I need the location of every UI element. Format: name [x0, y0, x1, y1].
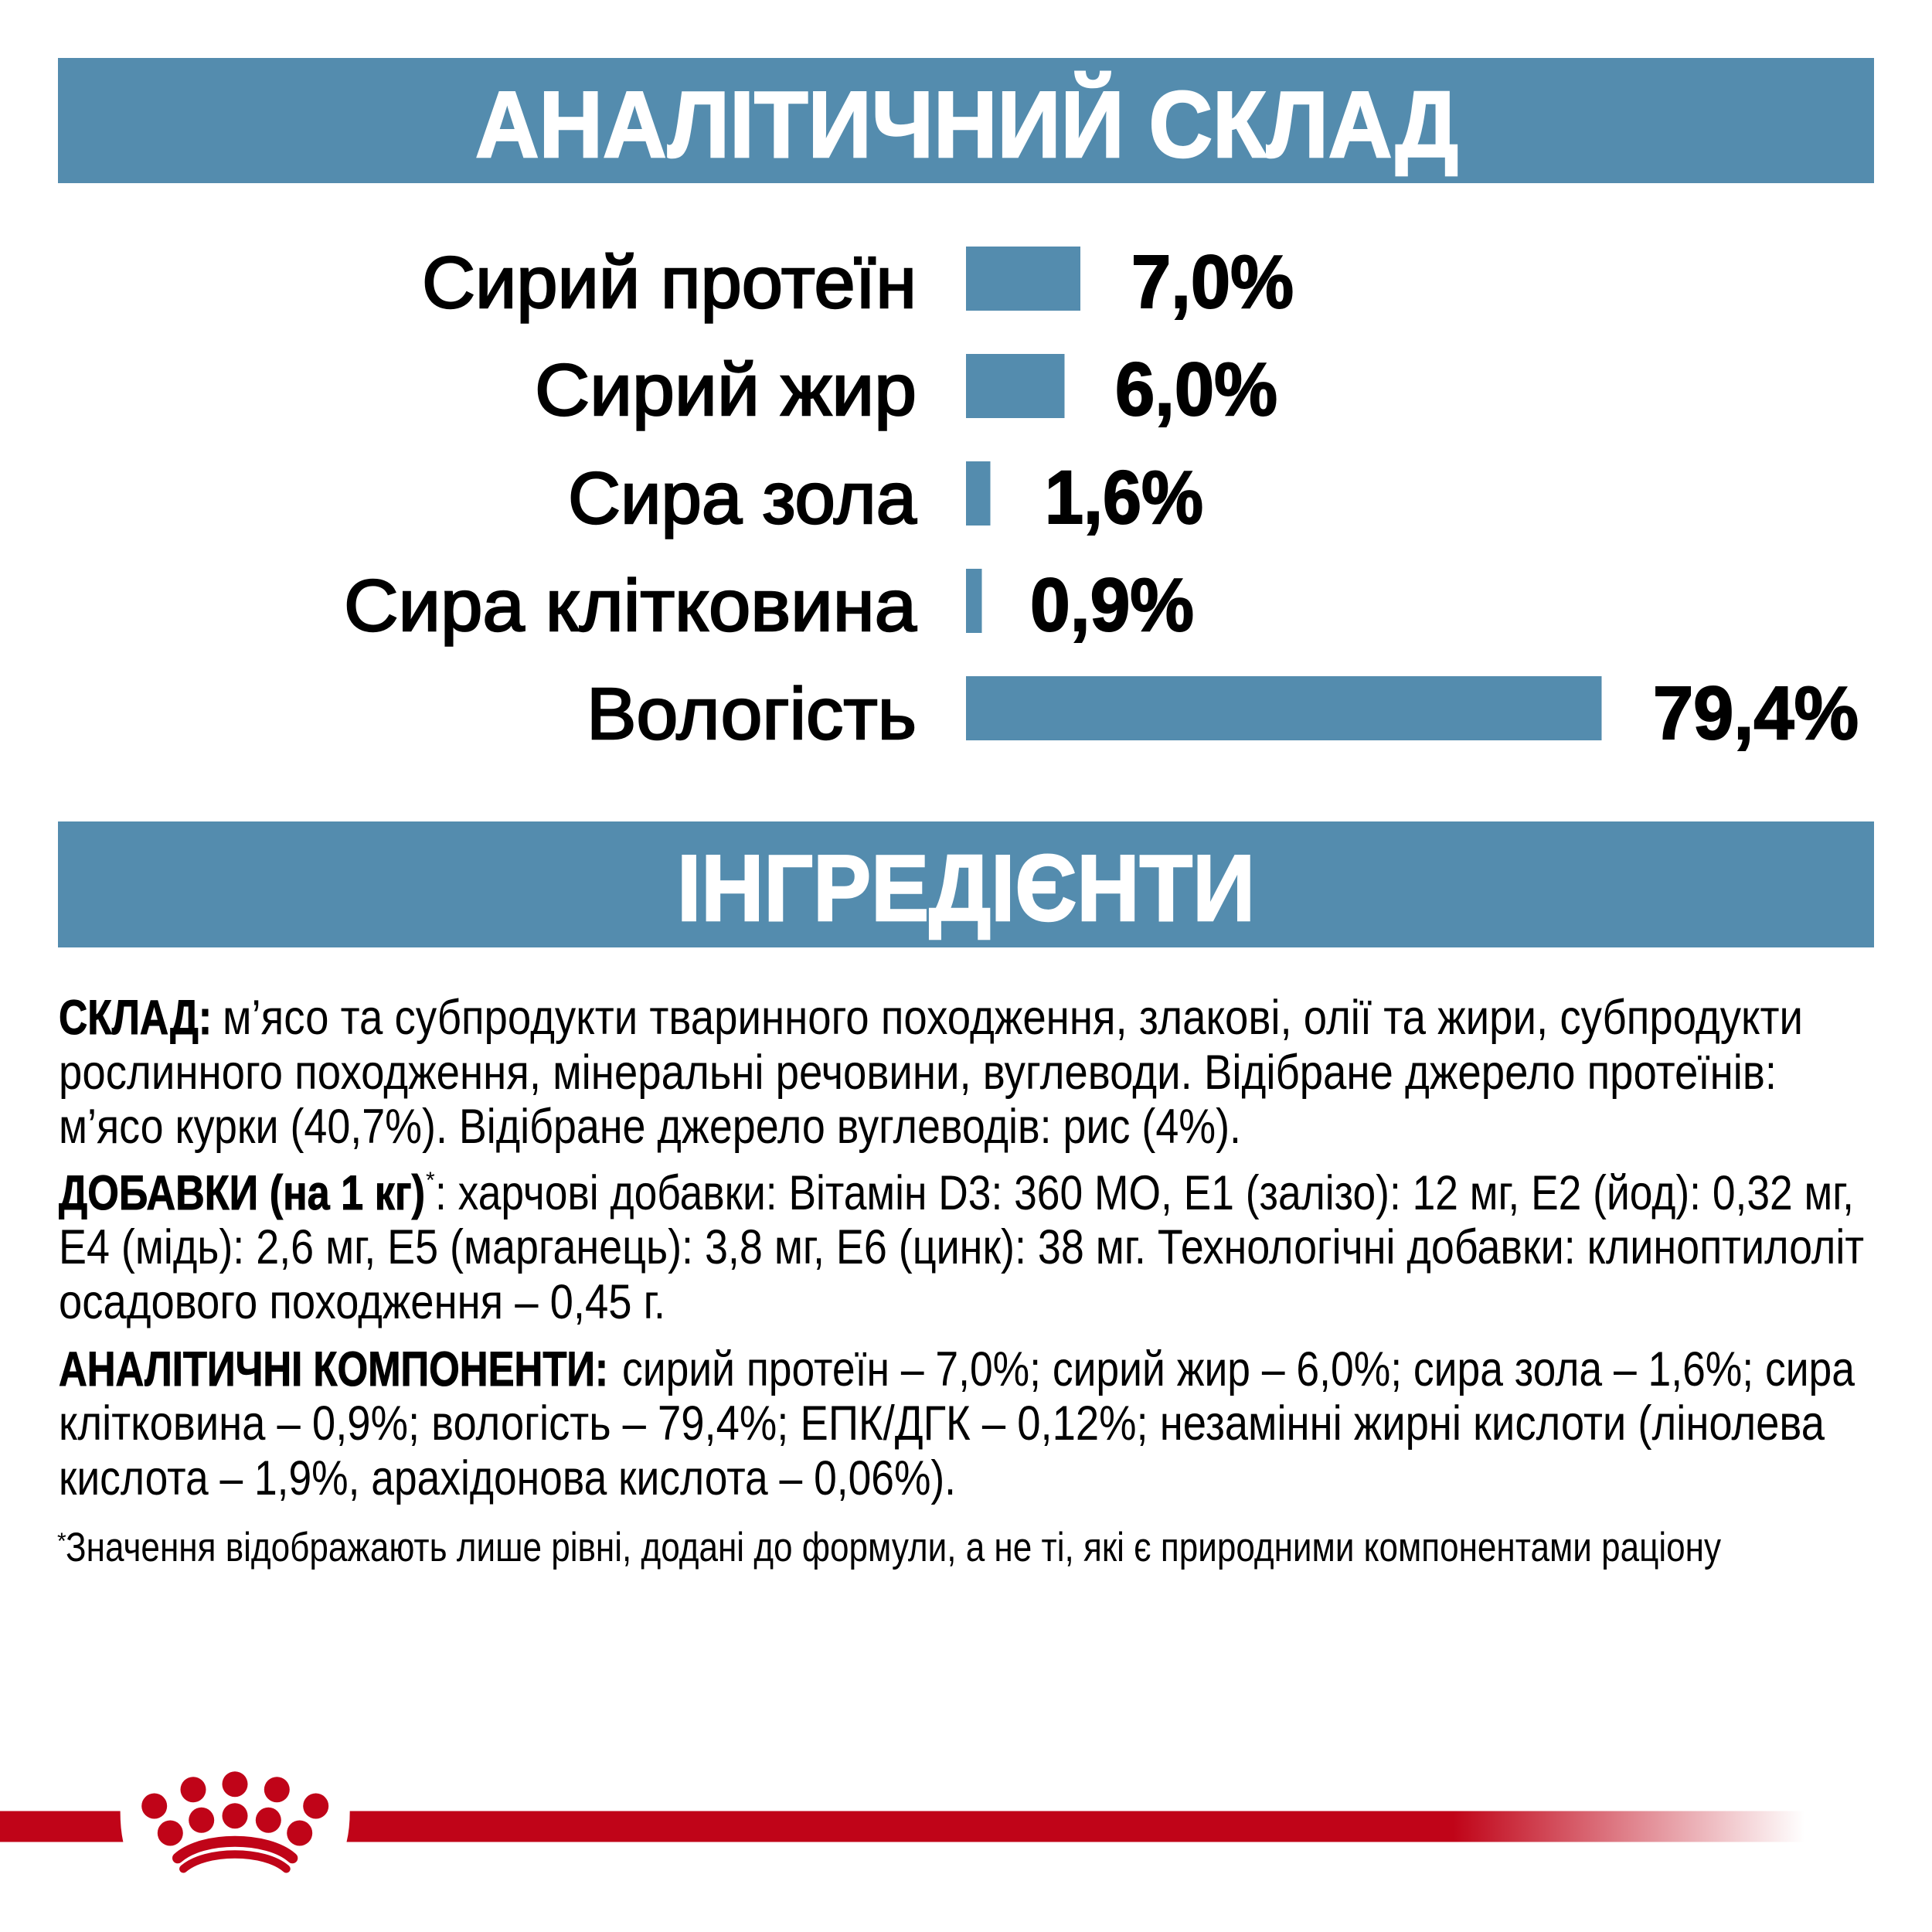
- row: crude protein: Сирий протеїн: [422, 242, 917, 324]
- text block: analytical components: [59, 1342, 1855, 1505]
- row: moisture: 79,4%: [1653, 671, 1859, 755]
- row: crude fat: 6,0%: [1115, 347, 1277, 431]
- text block: analytical components: АНАЛІТИЧНІ КОМПОНЕНТИ:: [59, 1342, 608, 1396]
- text block: composition: [59, 991, 1803, 1154]
- row: crude fat: [535, 347, 1277, 431]
- row: moisture: [587, 671, 1859, 755]
- text block: composition: СКЛАД:: [59, 991, 212, 1045]
- row: moisture: Вологість: [587, 673, 917, 755]
- icon: royal crown logo: [141, 1771, 328, 1869]
- heading band: ingredients: ІНГРЕДІЄНТИ: [677, 835, 1255, 940]
- heading band: analytical composition: АНАЛІТИЧНИЙ СКЛАД: [475, 71, 1458, 177]
- heading band: ingredients: [58, 821, 1874, 947]
- row: crude protein: 7,0%: [1131, 240, 1294, 324]
- red line: left segment: [0, 1811, 123, 1842]
- text block: composition: м’ясо курки (40,7%). Відібране джерело вуглеводів: рис (4%).: [59, 1100, 1241, 1154]
- heading band: analytical composition: [58, 58, 1874, 183]
- text block: additives: [59, 1166, 1864, 1329]
- row: crude fibre: [344, 563, 1194, 647]
- text block: additives: ДОБАВКИ (на 1 кг): [59, 1166, 425, 1220]
- panel: ingredients: [57, 821, 1874, 1570]
- text block: analytical components: кислота – 1,9%, арахідонова кислота – 0,06%).: [59, 1451, 956, 1505]
- text block: additives: осадового походження – 0,45 г.: [59, 1275, 665, 1329]
- panel: analytical composition: [58, 58, 1874, 755]
- row: crude ash: 1,6%: [1045, 455, 1203, 539]
- text block: additives: *: [426, 1168, 435, 1193]
- row: crude fibre: Сира клітковина: [344, 565, 917, 647]
- red line: right segment fading out: [346, 1811, 1804, 1842]
- row: crude ash: Сира зола: [568, 457, 917, 539]
- row: crude protein: [422, 240, 1294, 324]
- footer brand strip: [0, 1771, 1804, 1869]
- row: crude fibre: 0,9%: [1030, 563, 1194, 647]
- bar chart: composition percentages: [344, 240, 1859, 755]
- row: crude fat: Сирий жир: [535, 349, 917, 431]
- row: crude ash: [568, 455, 1203, 539]
- footnote: *: [57, 1529, 66, 1554]
